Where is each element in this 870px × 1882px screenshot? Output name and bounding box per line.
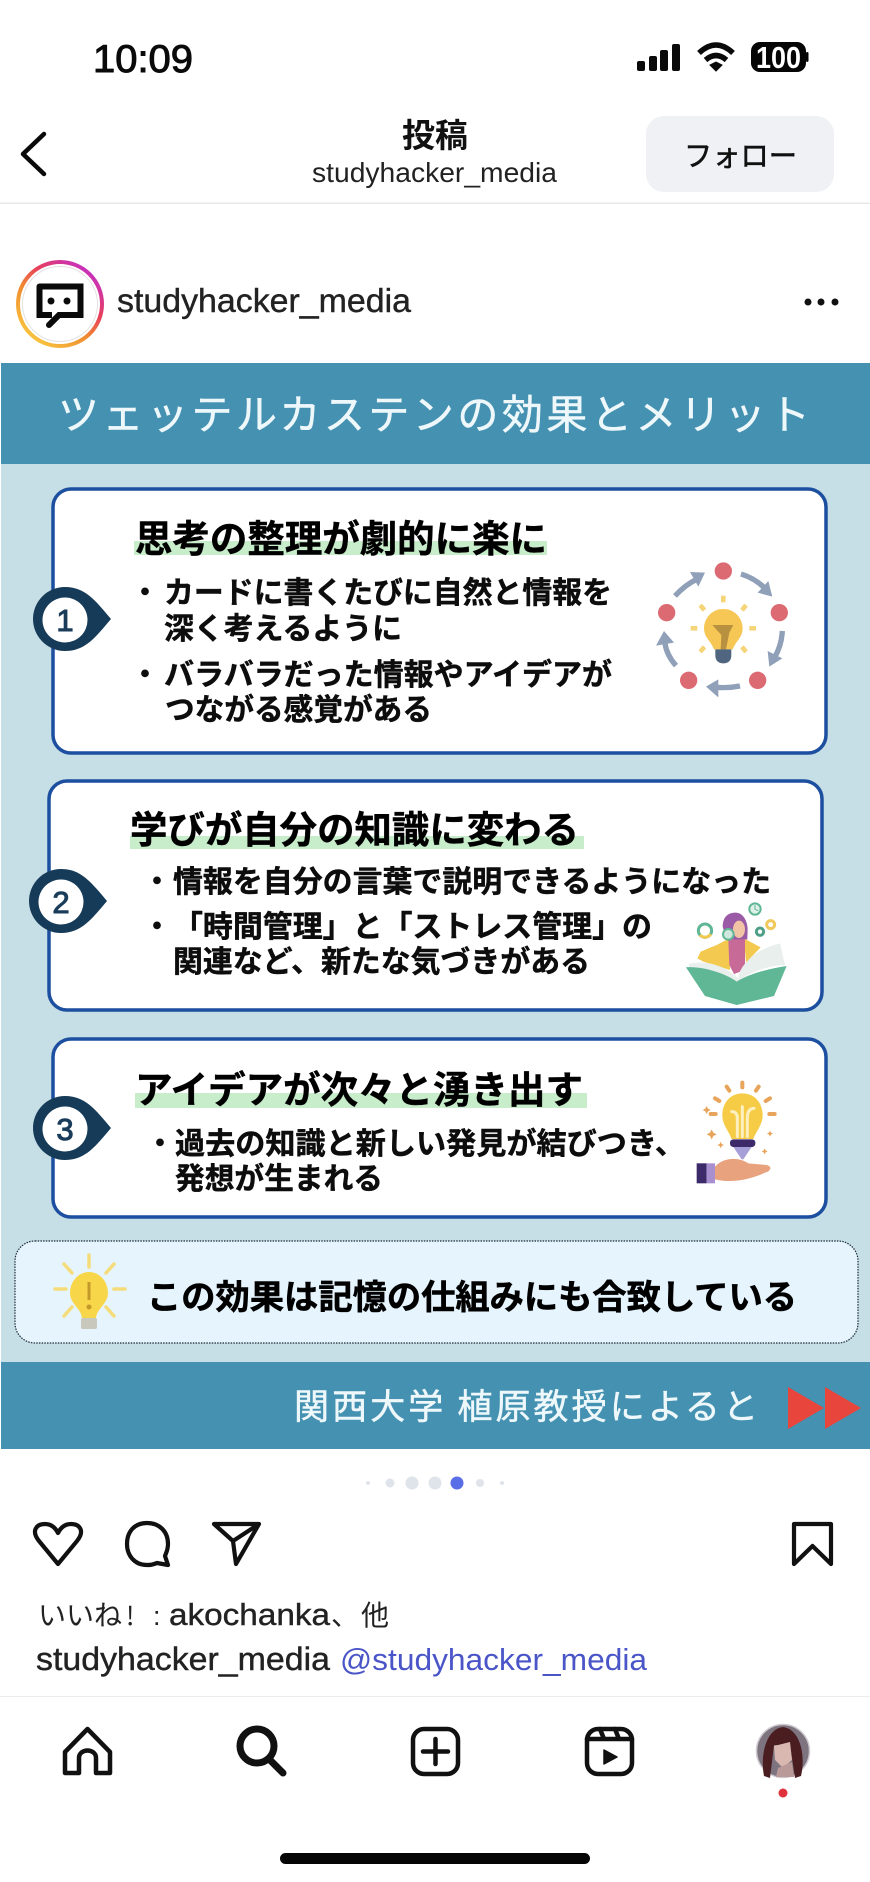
icon: home bbox=[65, 1729, 110, 1773]
caption line: @studyhacker_media bbox=[340, 1642, 648, 1677]
panel background bbox=[1, 363, 870, 1449]
badge 1 bbox=[33, 587, 111, 651]
bottom navigation bbox=[65, 1729, 632, 1774]
badge 3: 3 bbox=[56, 1112, 74, 1147]
bullets 2: 「時間管理」と「ストレス管理」の bbox=[173, 902, 652, 946]
title banner bbox=[1, 363, 870, 464]
navigation header bbox=[23, 109, 834, 192]
icon: idea cycle bbox=[656, 562, 788, 697]
avatar with gradient ring bbox=[18, 262, 102, 346]
profile avatar bbox=[756, 1724, 810, 1778]
icon: reader with open book bbox=[686, 903, 787, 1005]
card 3 bbox=[33, 1039, 826, 1217]
icon: battery: 100 bbox=[756, 40, 801, 75]
likes line: : bbox=[153, 1601, 161, 1631]
status bar bbox=[93, 38, 808, 81]
bullets 1 bbox=[130, 568, 612, 729]
icon: bulb over hand bbox=[697, 1083, 775, 1183]
title banner: ツェッテルカステンの効果とメリット bbox=[58, 381, 810, 441]
follow button: フォロー bbox=[684, 133, 797, 175]
bullets 3: 発想が生まれる bbox=[175, 1154, 383, 1198]
follow button bbox=[646, 116, 834, 192]
bullets 2: ・ bbox=[142, 902, 172, 946]
card 1 bbox=[33, 489, 826, 753]
badge 3 bbox=[33, 1096, 111, 1160]
clock: 10:09 bbox=[93, 38, 193, 81]
card 2 bbox=[29, 781, 822, 1010]
bullets 1: ・ bbox=[130, 650, 160, 694]
bottom nav divider bbox=[0, 1696, 870, 1697]
bullets 3: 過去の知識と新しい発見が結びつき、 bbox=[175, 1119, 685, 1163]
heading 1 with highlight: 思考の整理が劇的に楽に bbox=[135, 508, 547, 563]
callout bbox=[15, 1241, 858, 1343]
action icons bbox=[35, 1523, 831, 1565]
likes line: akochanka bbox=[169, 1597, 331, 1632]
infographic panel bbox=[1, 363, 870, 1449]
notification dot bbox=[778, 1788, 788, 1798]
bullets 3: ・ bbox=[145, 1119, 175, 1163]
header title: 投稿 bbox=[402, 109, 468, 157]
carousel dots bbox=[366, 1476, 504, 1490]
icon: back chevron bbox=[23, 134, 44, 174]
icon: heart bbox=[35, 1524, 81, 1564]
icon: reels bbox=[587, 1729, 632, 1774]
likes line: 、 bbox=[331, 1594, 359, 1634]
likes line: いいね bbox=[38, 1594, 122, 1634]
icon: send bbox=[214, 1524, 259, 1564]
likes line: ! bbox=[126, 1596, 134, 1633]
icon: search bbox=[240, 1729, 283, 1773]
icon: wifi bbox=[699, 45, 733, 71]
source text: 関西大学 植原教授によると bbox=[294, 1379, 758, 1430]
bullets 2: 関連など、新たな気づきがある bbox=[173, 937, 590, 981]
bullets 1: バラバラだった情報やアイデアが bbox=[164, 650, 612, 694]
icon: signal bars bbox=[637, 44, 680, 71]
caption line bbox=[36, 1641, 648, 1677]
bullets 2: ・ bbox=[142, 857, 172, 901]
icon: new post bbox=[413, 1729, 458, 1774]
header account name: studyhacker_media bbox=[312, 157, 557, 188]
icon: light bulb bbox=[55, 1255, 125, 1329]
likes line bbox=[38, 1594, 389, 1634]
badge 2 bbox=[29, 869, 107, 933]
likes line: 他 bbox=[361, 1594, 389, 1634]
heading 2 with highlight: 学びが自分の知識に変わる bbox=[130, 799, 579, 854]
account name: studyhacker_media bbox=[117, 282, 412, 319]
bullets 2 bbox=[142, 857, 771, 981]
callout text: この効果は記憶の仕組みにも合致している bbox=[147, 1270, 797, 1319]
bullets 2: 情報を自分の言葉で説明できるようになった bbox=[173, 857, 771, 901]
icon: bookmark bbox=[794, 1524, 831, 1564]
bullets 1: カードに書くたびに自然と情報を bbox=[164, 568, 612, 612]
header divider bbox=[0, 202, 870, 204]
icon: more dots bbox=[804, 298, 838, 306]
badge 1: 1 bbox=[56, 603, 74, 638]
bullets 1: つながる感覚がある bbox=[165, 685, 432, 729]
caption line: studyhacker_media bbox=[36, 1641, 330, 1677]
heading 3 with highlight: アイデアが次々と湧き出す bbox=[135, 1059, 583, 1114]
icon: comment bbox=[127, 1523, 168, 1565]
bullets 3 bbox=[145, 1119, 685, 1198]
badge 2: 2 bbox=[52, 885, 70, 920]
arrow: next page bbox=[788, 1387, 861, 1429]
bottom banner bbox=[1, 1362, 870, 1449]
bullets 1: ・ bbox=[130, 568, 160, 612]
post account row bbox=[18, 262, 838, 346]
bullets 1: 深く考えるように bbox=[164, 604, 402, 648]
home indicator bbox=[280, 1853, 590, 1864]
